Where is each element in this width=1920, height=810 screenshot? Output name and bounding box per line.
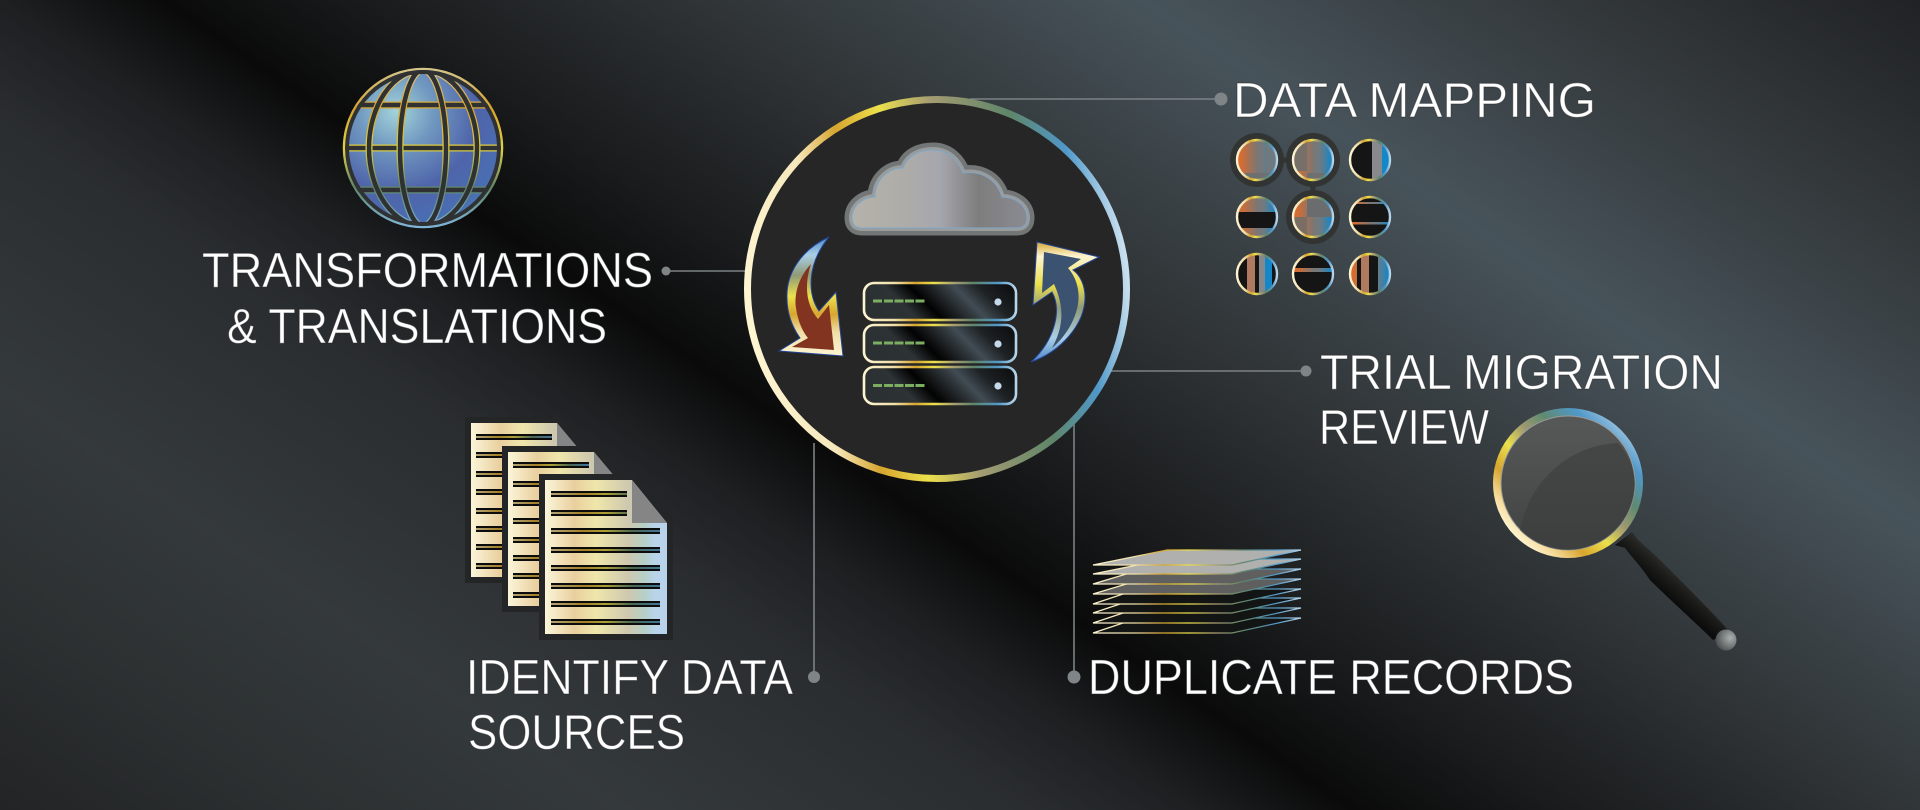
document front: [539, 474, 673, 640]
icon: magnifying glass: [1497, 412, 1736, 650]
label: identify data sources: IDENTIFY DATA: [466, 651, 793, 705]
icon: data mapping circle grid: [1230, 133, 1390, 294]
label: identify data sources: [466, 651, 793, 760]
label: transformations and translations: [202, 244, 653, 354]
icon: blue arrow: [1031, 242, 1099, 362]
circle disc with metallic ring: [748, 100, 1126, 478]
icon: server rack middle: [864, 325, 1016, 362]
label: duplicate records: DUPLICATE RECORDS: [1088, 651, 1574, 705]
document back: [465, 417, 599, 583]
label: data mapping: DATA MAPPING: [1233, 74, 1596, 128]
connector: duplicate records: [1068, 420, 1080, 684]
label: trial migration review: REVIEW: [1319, 401, 1490, 455]
central circle panel: [748, 100, 1126, 478]
label: identify data sources: SOURCES: [468, 706, 685, 760]
icon: globe: [340, 69, 506, 227]
icon: red arrow: [779, 237, 843, 356]
label: trial migration review: [1319, 346, 1723, 455]
label: transformations and translations: & TRANSLATIONS: [227, 300, 607, 354]
icon: server rack top: [864, 283, 1016, 320]
icon: cloud: [852, 150, 1027, 228]
connector: data mapping: [970, 92, 1228, 106]
connector: identify data sources: [808, 443, 820, 683]
connector: transformations: [662, 266, 748, 276]
connector: trial migration: [1108, 366, 1312, 376]
document middle: [502, 446, 636, 612]
label: transformations and translations: TRANSFORMATIONS: [202, 244, 653, 298]
icon: stacked documents: [465, 417, 673, 640]
icon: stacked layers: [1093, 550, 1301, 633]
label: trial migration review: TRIAL MIGRATION: [1320, 346, 1723, 400]
icon: server rack bottom: [864, 367, 1016, 404]
